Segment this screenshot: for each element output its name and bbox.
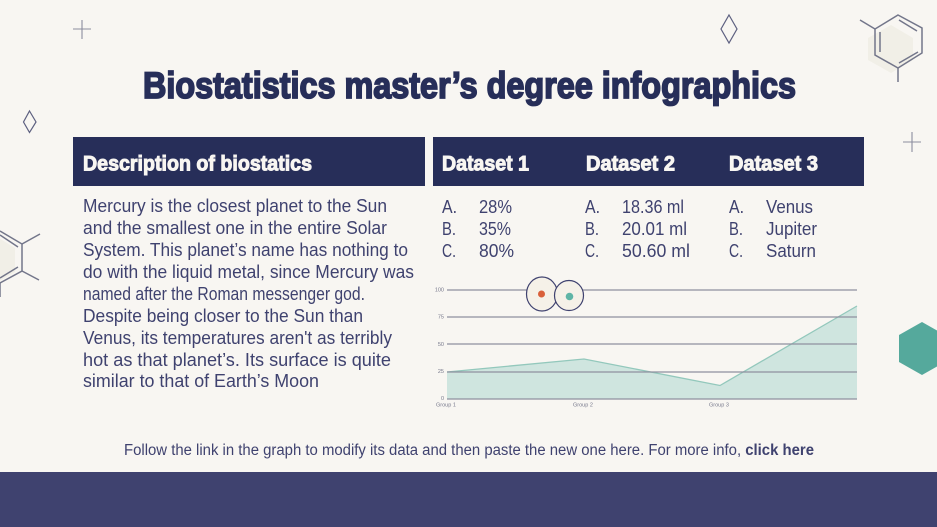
dataset 1 list — [442, 197, 514, 261]
decorative diamond top — [721, 15, 737, 43]
dataset 3 list: Jupiter — [766, 219, 817, 239]
panel: datasets header — [433, 137, 864, 186]
description heading: Description of biostatics — [83, 152, 312, 176]
description text: hot as that planet’s. Its surface is quite — [83, 350, 391, 370]
bottom band — [0, 472, 937, 527]
description heading — [73, 137, 425, 186]
panel: datasets header: Dataset 2 — [586, 152, 675, 176]
dataset 2 list: 50.60 ml — [622, 241, 690, 261]
area chart: 0 — [441, 396, 444, 402]
dataset 3 list — [729, 197, 817, 261]
area chart: 75 — [438, 314, 444, 320]
description text: and the smallest one in the entire Solar — [83, 218, 387, 238]
description text: Despite being closer to the Sun than — [83, 306, 363, 326]
description text — [83, 196, 414, 391]
area chart: Group 2 — [573, 402, 593, 408]
description text: Mercury is the closest planet to the Sun — [83, 196, 387, 216]
area chart: Group 1 — [436, 402, 456, 408]
dataset 2 list: C. — [585, 241, 599, 261]
dataset 3 list: C. — [729, 241, 743, 261]
dataset 1 list: 80% — [479, 241, 514, 261]
panel: datasets header: Dataset 3 — [729, 152, 818, 176]
panel: description — [73, 137, 425, 391]
area chart: 50 — [438, 342, 444, 348]
area chart — [435, 277, 857, 408]
panel: datasets header: Dataset 1 — [442, 152, 529, 176]
dataset 2 list: A. — [585, 197, 600, 217]
area chart: 25 — [438, 369, 444, 375]
dataset 3 list: B. — [729, 219, 743, 239]
dataset 3 list: A. — [729, 197, 744, 217]
footer note: Follow the link in the graph to modify its data and then paste the new one here. For more info, click here — [124, 442, 814, 459]
dataset 1 list: 35% — [479, 219, 511, 239]
description text: Venus, its temperatures aren't as terribly — [83, 328, 392, 348]
description text: do with the liquid metal, since Mercury was — [83, 262, 414, 282]
decorative plus right — [903, 132, 921, 152]
Venn marker circles — [526, 277, 584, 311]
description text: System. This planet’s name has nothing to — [83, 240, 408, 260]
title: Biostatistics master’s degree infographics — [143, 64, 796, 106]
icon: molecule top right — [860, 15, 922, 82]
area chart: 100 — [435, 288, 444, 294]
dataset 2 list: B. — [585, 219, 599, 239]
area chart: Group 3 — [709, 402, 729, 408]
dataset 2 list — [585, 197, 690, 261]
decorative diamond left — [24, 111, 36, 132]
dataset 2 list: 20.01 ml — [622, 219, 687, 239]
icon: molecule left — [0, 231, 40, 297]
decorative plus top left — [73, 20, 91, 39]
dataset 1 list: A. — [442, 197, 457, 217]
dataset 1 list: C. — [442, 241, 456, 261]
dataset 1 list: 28% — [479, 197, 512, 217]
icon: teal hexagon — [899, 322, 937, 375]
dataset 3 list: Venus — [766, 197, 813, 217]
dataset 3 list: Saturn — [766, 241, 816, 261]
dataset 2 list: 18.36 ml — [622, 197, 684, 217]
description text: named after the Roman messenger god. — [83, 284, 365, 304]
dataset 1 list: B. — [442, 219, 456, 239]
description text: similar to that of Earth’s Moon — [83, 371, 319, 391]
